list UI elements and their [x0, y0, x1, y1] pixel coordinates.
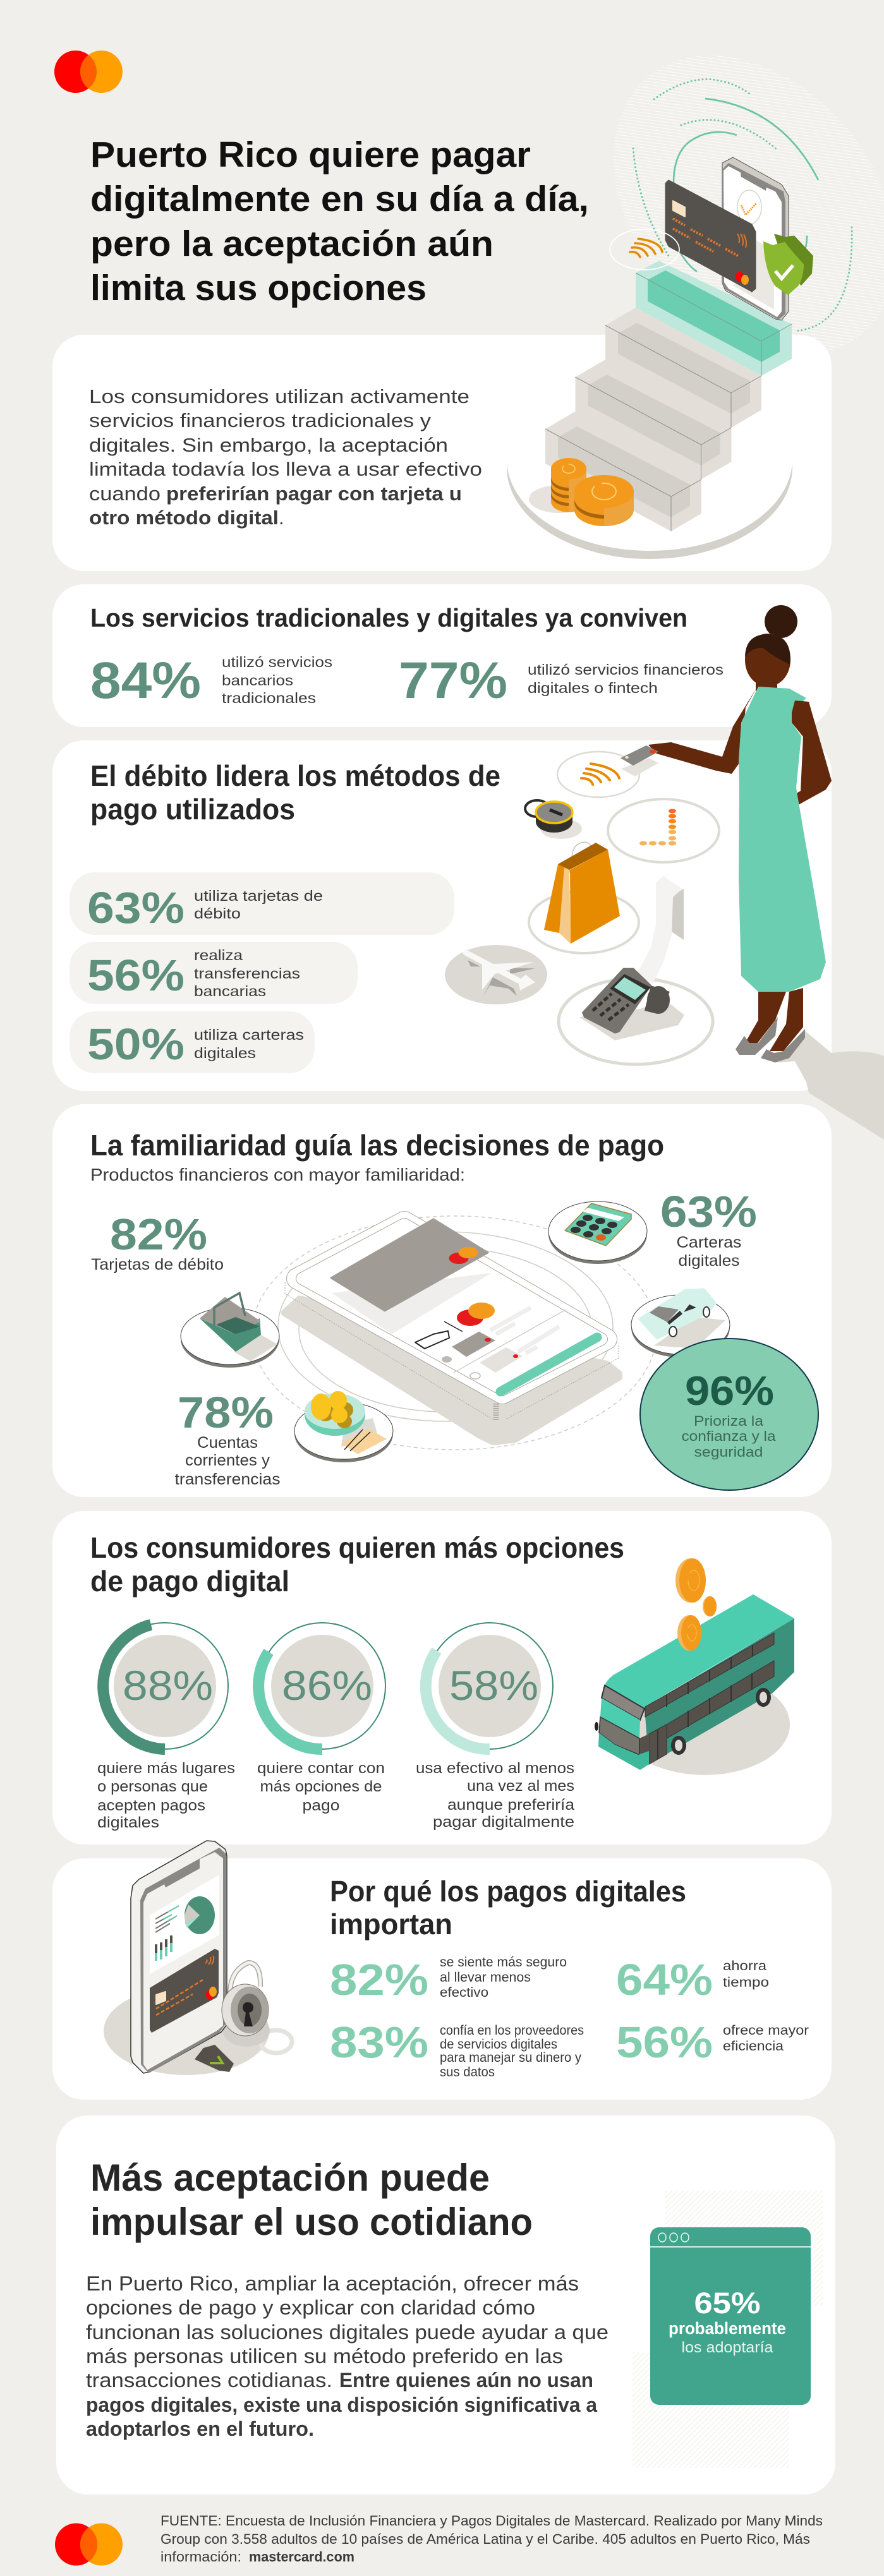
text block: intro paragraph: limitada todavía los lleva a usar efectivo [89, 458, 482, 480]
text block: intro paragraph: . [279, 507, 284, 529]
stat: 83% trust [330, 2018, 584, 2079]
callout: 96% trust and security [640, 1339, 818, 1490]
stat: 78% accounts: Cuentas [197, 1434, 258, 1452]
icon: shopping bag [529, 842, 639, 953]
coins stacks [551, 458, 634, 526]
subheading: Productos financieros con mayor familiaridad: [90, 1165, 465, 1184]
text block: closing paragraph: En Puerto Rico, ampliar la aceptación, ofrecer más [86, 2272, 579, 2295]
stat: 63% wallets: Carteras [676, 1234, 742, 1251]
phone [722, 157, 789, 320]
stat: 56% efficiency: eficiencia [723, 2039, 784, 2054]
shield [763, 234, 813, 295]
icon: receipt and POS terminal [559, 876, 713, 1064]
hatched backdrop [633, 2191, 823, 2468]
text block: closing paragraph: transacciones cotidianas. [86, 2369, 332, 2392]
stat: 82% debit cards: 82% [110, 1210, 207, 1259]
stat: 84%: bancarios [222, 672, 293, 689]
text block: intro paragraph: Los consumidores utilizan activamente [89, 385, 469, 407]
stat: 56% efficiency: ofrece mayor [723, 2023, 809, 2038]
title [90, 135, 589, 308]
donut: 86%: pago [302, 1797, 340, 1814]
heading [90, 2157, 533, 2243]
stat: 82% safer: se siente más seguro [440, 1955, 567, 1970]
stat: 78% accounts: corrientes y [185, 1452, 270, 1469]
illustration: phone with cards [285, 1219, 619, 1441]
logo: Mastercard top [54, 51, 123, 93]
text block: closing paragraph: opciones de pago y explicar con claridad cómo [86, 2296, 535, 2319]
stat: 63% wallets: 63% [660, 1187, 757, 1236]
pill: 56%: realiza [194, 947, 243, 963]
icon: car [631, 1290, 730, 1357]
stat: 64% saves time: tiempo [723, 1975, 769, 1990]
heading: de pago digital [90, 1565, 289, 1598]
heading: importan [330, 1908, 452, 1941]
heading [90, 759, 500, 826]
icon: plane [445, 945, 547, 1004]
logo: Mastercard bottom [55, 2523, 123, 2566]
stat: 78% accounts [174, 1388, 281, 1488]
bank card [665, 180, 756, 292]
callout: 96% trust and security: confianza y la [681, 1428, 776, 1444]
pill: 50%: 50% [87, 1020, 185, 1069]
donut: 86%: quiere contar con [257, 1760, 385, 1777]
stat: 84%: 84% [90, 652, 201, 709]
icon: basket [181, 1293, 279, 1368]
donut: 86%: más opciones de [260, 1778, 382, 1795]
pill: 56%: bancarias [194, 983, 266, 999]
heading: pago utilizados [90, 793, 295, 826]
heading: Los servicios tradicionales y digitales ya conviven [90, 603, 687, 632]
pill: 50%: utiliza carteras [194, 1026, 304, 1043]
background hatched blob [555, 0, 884, 411]
callout: 96% trust and security: seguridad [694, 1444, 763, 1460]
donut: 88%: 88% [123, 1662, 213, 1709]
pill: 56% [70, 942, 358, 1004]
stat: 63% wallets: digitales [679, 1252, 739, 1270]
callout: 65% browser window [650, 2227, 811, 2405]
stat: 77% [399, 652, 724, 709]
donut: 86% [257, 1623, 385, 1814]
text block: closing paragraph [86, 2272, 609, 2440]
panel: more acceptance [56, 2116, 835, 2495]
title: Puerto Rico quiere pagar [90, 135, 531, 175]
panel: traditional and digital services [52, 584, 832, 727]
text block: intro paragraph: preferirían pagar con tarjeta u [166, 483, 462, 505]
icon: dotted circle [608, 799, 719, 862]
stat: 84% [90, 652, 332, 709]
stat: 82% debit cards [91, 1210, 224, 1273]
callout: 96% trust and security: Prioriza la [694, 1413, 764, 1429]
callout: 65% browser window: 65% [694, 2286, 761, 2320]
pill: 63%: débito [194, 905, 241, 922]
donut: 86%: 86% [282, 1662, 372, 1709]
text block: intro paragraph: servicios financieros tradicionales y [89, 409, 432, 431]
heading: impulsar el uso cotidiano [90, 2201, 533, 2243]
icon: padlock cylinder [525, 800, 582, 839]
text block: closing paragraph: funcionan las soluciones digitales puede ayudar a que [86, 2321, 609, 2344]
stat: 77%: utilizó servicios financieros [528, 661, 724, 678]
heading: El débito lidera los métodos de [90, 759, 500, 792]
pill: 63% [70, 872, 454, 935]
title: pero la aceptación aún [90, 224, 493, 264]
icon: contactless [610, 229, 679, 270]
stat: 83% trust: de servicios digitales [440, 2037, 557, 2052]
heading: Por qué los pagos digitales [330, 1875, 686, 1908]
pill: 63%: 63% [87, 883, 185, 932]
pill: 56%: transferencias [194, 965, 300, 982]
source note: mastercard.com [249, 2549, 354, 2565]
heading: Más aceptación puede [90, 2157, 490, 2199]
stat: 78% accounts: 78% [178, 1388, 274, 1437]
stat: 82% safer: al llevar menos [440, 1970, 531, 1985]
text block: intro paragraph: otro método digital [89, 507, 279, 529]
pill: 56%: 56% [87, 951, 185, 1000]
title: digitalmente en su día a día, [90, 179, 589, 219]
stat: 77%: digitales o fintech [528, 680, 658, 696]
panel: more digital options [52, 1511, 832, 1845]
heading: La familiaridad guía las decisiones de pago [90, 1129, 664, 1162]
text block: intro paragraph: cuando [89, 483, 160, 505]
stat: 82% safer [330, 1955, 567, 2004]
donut: 88% [97, 1623, 235, 1831]
donut: 88%: acepten pagos [97, 1797, 205, 1814]
icon: contactless circle [557, 752, 658, 797]
donut: 88%: o personas que [97, 1778, 208, 1795]
source note: información: [160, 2549, 241, 2565]
stat: 64% saves time: ahorra [723, 1959, 766, 1973]
stat: 64% saves time: 64% [616, 1955, 713, 2004]
heading [330, 1875, 686, 1941]
heading [90, 1531, 624, 1598]
text block: closing paragraph: Entre quienes aún no usan [339, 2369, 593, 2392]
stat: 56% efficiency [616, 2018, 809, 2067]
donut: 58% [416, 1623, 575, 1831]
stat: 64% saves time [616, 1955, 769, 2004]
stat: 84%: tradicionales [222, 690, 316, 706]
illustration: bus with coins [595, 1558, 794, 1775]
stat: 82% safer: efectivo [440, 1985, 488, 2000]
illustration: stairs with phone [507, 80, 852, 559]
illustration: woman paying [621, 605, 884, 1140]
stat: 82% safer: 82% [330, 1955, 428, 2004]
panel: why digital payments matter [52, 1841, 832, 2100]
coins falling [675, 1558, 717, 1651]
text block: closing paragraph: adoptarlos en el futuro. [86, 2417, 314, 2440]
stat: 82% debit cards: Tarjetas de débito [91, 1256, 224, 1273]
source note [160, 2513, 823, 2565]
stat: 83% trust: sus datos [440, 2065, 495, 2079]
orbit rings [252, 1216, 657, 1450]
callout: 65% browser window: probablemente [669, 2319, 786, 2338]
title: limita sus opciones [90, 268, 427, 308]
stat: 83% trust: para manejar su dinero y [440, 2050, 581, 2065]
stat: 63% wallets [660, 1187, 757, 1270]
illustration: phone with padlock [104, 1841, 292, 2075]
stat: 56% efficiency: 56% [616, 2018, 713, 2067]
panel: debit leads [52, 740, 832, 1091]
stat: 83% trust: confía en los proveedores [440, 2023, 584, 2038]
donut: 58%: pagar digitalmente [433, 1814, 574, 1831]
donut: 58%: aunque preferiría [447, 1797, 575, 1814]
donut: 58%: una vez al mes [467, 1778, 574, 1795]
stat: 83% trust: 83% [330, 2018, 428, 2067]
donut: 88%: quiere más lugares [97, 1760, 235, 1777]
pill: 50%: digitales [194, 1045, 256, 1061]
text block: intro paragraph: digitales. Sin embargo, la aceptación [89, 434, 448, 456]
source note: Group con 3.558 adultos de 10 países de América Latina y el Caribe. 405 adultos en Puerto Rico, Más [160, 2531, 810, 2547]
donut: 58%: 58% [449, 1662, 538, 1709]
stat: 77%: 77% [399, 652, 507, 709]
pill: 63%: utiliza tarjetas de [194, 888, 323, 904]
text block: closing paragraph: pagos digitales, existe una disposición significativa a [86, 2393, 597, 2416]
stat: 78% accounts: transferencias [174, 1471, 281, 1488]
dotted and solid arcs [633, 80, 852, 331]
source note: FUENTE: Encuesta de Inclusión Financiera y Pagos Digitales de Mastercard. Realizado por Many Minds [160, 2513, 823, 2529]
icon: calculator [548, 1201, 647, 1264]
callout: 96% trust and security: 96% [685, 1368, 774, 1414]
green top step [636, 261, 792, 376]
callout: 65% browser window: los adoptaría [681, 2339, 773, 2356]
panel: familiarity [52, 1104, 832, 1497]
pill: 50% [70, 1011, 315, 1073]
text block: intro paragraph [89, 385, 482, 529]
donut: 88%: digitales [97, 1814, 159, 1831]
stat: 84%: utilizó servicios [222, 654, 332, 670]
donut: 58%: usa efectivo al menos [416, 1760, 574, 1777]
stone steps [545, 308, 761, 531]
text block: closing paragraph: más personas utilicen su método preferido en las [86, 2345, 563, 2368]
icon: coins plate [294, 1391, 393, 1462]
heading: Los consumidores quieren más opciones [90, 1531, 624, 1564]
